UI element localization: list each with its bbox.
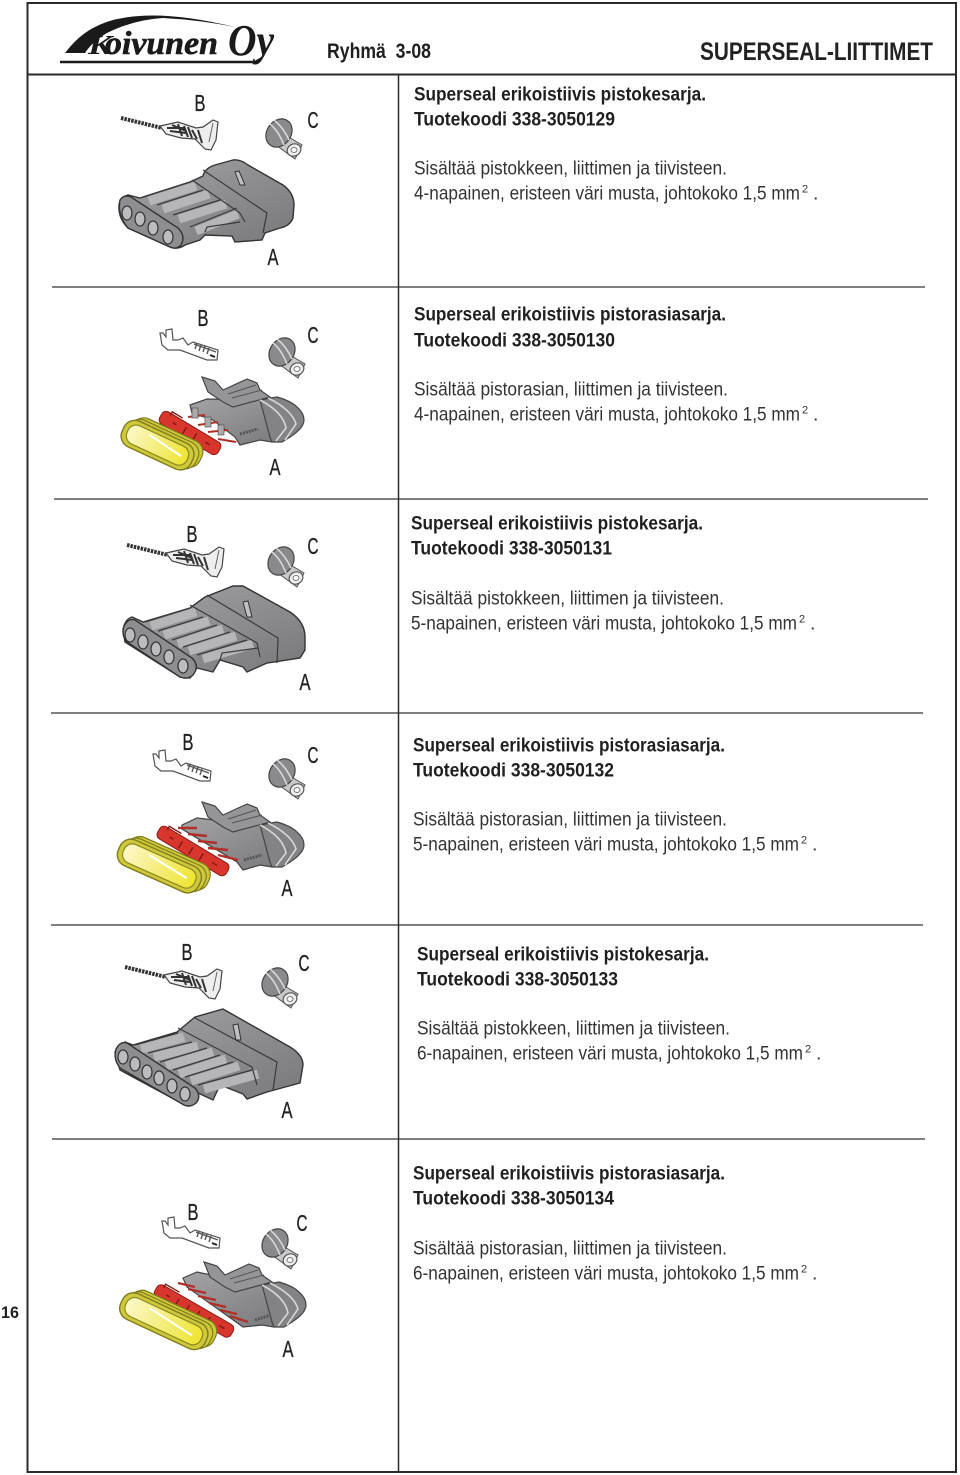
product text 2: Superseal erikoistiivis pistorasiasarja. <box>414 304 726 326</box>
product text 3 <box>411 513 815 635</box>
letters: A <box>300 669 311 695</box>
product text 2: 4-napainen, eristeen väri musta, johtokoko 1,5 mm <box>414 404 800 426</box>
product text 6 <box>413 1163 817 1285</box>
letters: B <box>198 305 208 331</box>
letters <box>194 90 318 270</box>
product text 6: 2 <box>801 1264 807 1276</box>
product text 4: 5-napainen, eristeen väri musta, johtokoko 1,5 mm <box>413 834 799 856</box>
icon: seal C <box>264 754 306 799</box>
product text 3: . <box>810 613 815 635</box>
illustration: 4-pin plug kit <box>119 90 318 270</box>
connector A with red retainer and yellow seal, 5 pins <box>113 802 304 900</box>
letters <box>182 729 318 901</box>
letters <box>188 1199 308 1362</box>
letters: A <box>282 1336 294 1362</box>
letters <box>198 305 318 480</box>
letters <box>182 939 310 1123</box>
logo: Koivunen Oy: Oy <box>228 16 274 65</box>
icon: plug contact B <box>127 545 224 577</box>
product text 4: Sisältää pistorasian, liittimen ja tiivisteen. <box>413 809 727 831</box>
illustration: 6-pin receptacle kit <box>116 1199 308 1362</box>
illustration: 6-pin plug kit <box>115 939 310 1123</box>
connector A with red retainer and yellow seal, 6 pins <box>116 1262 306 1356</box>
letters: A <box>282 875 293 901</box>
product text 1: Superseal erikoistiivis pistokesarja. <box>414 84 706 106</box>
logo: Koivunen Oy: K <box>87 30 115 60</box>
letters <box>186 521 318 695</box>
product text 5: Superseal erikoistiivis pistokesarja. <box>417 944 709 966</box>
product text 5 <box>417 944 821 1065</box>
product text 1: 4-napainen, eristeen väri musta, johtokoko 1,5 mm <box>414 183 800 205</box>
connector A, 6 pins <box>115 1009 303 1106</box>
product text 2: . <box>813 404 818 426</box>
icon: seal C <box>264 333 306 378</box>
product text 4: Superseal erikoistiivis pistorasiasarja. <box>413 735 725 757</box>
product text 5: Tuotekoodi 338-3050133 <box>417 969 618 991</box>
icon: plug contact B <box>121 118 218 150</box>
letters: C <box>298 950 310 976</box>
letters: C <box>308 533 318 559</box>
letters: C <box>296 1210 308 1236</box>
connector A, 4 pins <box>119 160 294 248</box>
product text 4: . <box>812 834 817 856</box>
product text 5: . <box>816 1043 821 1065</box>
letters: B <box>194 90 206 116</box>
logo: Koivunen Oy <box>60 15 274 65</box>
product text 4: Tuotekoodi 338-3050132 <box>413 760 614 782</box>
letters: C <box>308 742 318 768</box>
icon: plug contact B <box>125 967 222 999</box>
letters: C <box>308 322 318 348</box>
product text 4 <box>413 735 817 856</box>
icon: receptacle contact B <box>160 329 218 360</box>
letters: B <box>186 521 198 547</box>
product text 5: 2 <box>805 1044 811 1056</box>
product text 2 <box>414 304 818 426</box>
icon: receptacle contact B <box>153 750 211 781</box>
product text 6: . <box>812 1263 817 1285</box>
letters: A <box>268 244 279 270</box>
icon: seal C <box>261 114 303 159</box>
icon: seal C <box>257 1224 299 1269</box>
product text 3: 2 <box>799 614 805 626</box>
product text 5: Sisältää pistokkeen, liittimen ja tiivisteen. <box>417 1018 730 1040</box>
illustration: 4-pin receptacle kit <box>117 305 318 480</box>
product text 3: Superseal erikoistiivis pistokesarja. <box>411 513 703 535</box>
product text 3: Tuotekoodi 338-3050131 <box>411 538 612 560</box>
product text 1: Tuotekoodi 338-3050129 <box>414 109 615 131</box>
letters: B <box>182 729 194 755</box>
page number: 16 <box>1 1303 19 1322</box>
product text 6: Sisältää pistorasian, liittimen ja tiivisteen. <box>413 1238 727 1260</box>
product text 3: Sisältää pistokkeen, liittimen ja tiivisteen. <box>411 588 724 610</box>
icon: seal C <box>257 963 299 1008</box>
group label: Ryhmä 3-08 <box>327 40 431 63</box>
icon: seal C <box>263 542 305 587</box>
product text 1: Sisältää pistokkeen, liittimen ja tiivisteen. <box>414 158 727 180</box>
product text 1 <box>414 84 818 205</box>
connector A, 5 pins <box>123 586 305 678</box>
product text 3: 5-napainen, eristeen väri musta, johtokoko 1,5 mm <box>411 613 797 635</box>
product text 6: 6-napainen, eristeen väri musta, johtokoko 1,5 mm <box>413 1263 799 1285</box>
product text 6: Tuotekoodi 338-3050134 <box>413 1188 614 1210</box>
product text 2: 2 <box>802 405 808 417</box>
icon: receptacle contact B <box>162 1217 220 1248</box>
letters: B <box>188 1199 198 1225</box>
connector A with red retainer and yellow seal, 4 pins <box>117 377 304 477</box>
letters: A <box>270 454 281 480</box>
letters: B <box>182 939 192 965</box>
product text 1: . <box>813 183 818 205</box>
illustration: 5-pin receptacle kit <box>113 729 319 901</box>
product text 6: Superseal erikoistiivis pistorasiasarja. <box>413 1163 725 1185</box>
logo: Koivunen Oy: oivunen <box>105 26 218 62</box>
product text 5: 6-napainen, eristeen väri musta, johtokoko 1,5 mm <box>417 1043 803 1065</box>
letters: A <box>282 1097 293 1123</box>
product text 2: Sisältää pistorasian, liittimen ja tiivisteen. <box>414 379 728 401</box>
product text 4: 2 <box>801 835 807 847</box>
product text 1: 2 <box>802 184 808 196</box>
product text 2: Tuotekoodi 338-3050130 <box>414 330 615 352</box>
letters: C <box>308 107 318 133</box>
illustration: 5-pin plug kit <box>123 521 318 695</box>
